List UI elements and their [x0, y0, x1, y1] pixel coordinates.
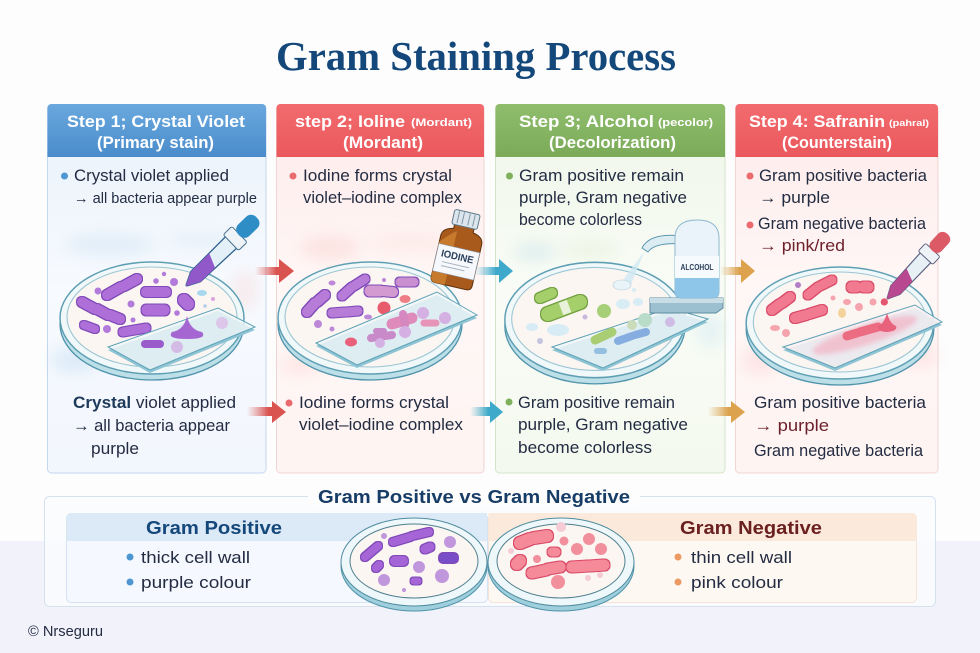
gram positive card: Gram Positive — [146, 518, 282, 538]
petri dish 4 — [746, 267, 934, 385]
step 4 text top: Gram negative bacteria — [758, 215, 927, 233]
step 1 text top: Crystal violet applied — [74, 167, 229, 185]
glass slide 1 — [108, 308, 255, 373]
step 3 header — [496, 104, 725, 157]
gram positive card: purple colour — [141, 574, 252, 592]
step 2 text bottom: Iodine forms crystal — [299, 394, 449, 412]
step 4 header: Step 4: Safranin — [749, 112, 885, 131]
petri dish 3 — [505, 262, 685, 384]
step 4 header: (Counterstain) — [782, 133, 892, 152]
step 1 text bottom: → all bacteria appear — [73, 417, 231, 435]
dropper 4 — [875, 227, 955, 311]
gram negative card: thin cell wall — [691, 549, 792, 567]
panel: step 4 safranin — [736, 104, 955, 473]
glass slide 4 — [783, 305, 942, 371]
comparison heading: Gram Positive vs Gram Negative — [318, 487, 630, 507]
step 3 text bottom: purple, Gram negative — [518, 416, 688, 434]
gram positive card: thick cell wall — [141, 549, 250, 567]
step 3 text top — [506, 167, 687, 229]
glass slide 3 — [552, 308, 708, 371]
gram negative card: Gram Negative — [680, 518, 822, 538]
arrow: step 3 to 4 top — [720, 259, 755, 283]
step 4 text bottom: → purple — [754, 417, 829, 435]
petri dish: gram negative — [488, 518, 634, 611]
step 2 text top — [290, 167, 463, 207]
petri dish: gram positive — [341, 518, 487, 611]
step 1 text bottom: Crystal violet applied — [73, 394, 236, 412]
arrow: step 2 to 3 bottom — [470, 401, 503, 423]
arrow: step 2 to 3 top — [475, 259, 513, 283]
step 2 text top: Iodine forms crystal — [303, 167, 452, 185]
watercolor wash — [742, 343, 938, 374]
step 3 text top: become colorless — [519, 211, 642, 229]
panel: step 2 iodine — [276, 104, 488, 473]
panel: gram positive vs gram negative — [44, 487, 936, 611]
step 3 text bottom — [506, 394, 688, 457]
step 4 header — [736, 104, 938, 157]
step 2 text bottom: violet–iodine complex — [299, 416, 464, 434]
copyright: © Nrseguru — [28, 623, 103, 640]
step 3 text bottom: Gram positive remain — [518, 394, 675, 412]
iodine bottle — [430, 207, 488, 291]
step 4 text bottom — [754, 394, 927, 460]
gram positive card — [66, 513, 488, 602]
step 2 text top: violet–iodine complex — [303, 189, 463, 207]
step 2 header: (Mordant) — [411, 117, 472, 129]
step 2 header: (Mordant) — [343, 133, 423, 152]
step 3 header: Step 3; Alcohol — [519, 112, 654, 131]
arrow: step 1 to 2 top — [255, 259, 294, 283]
gram negative card — [488, 513, 917, 602]
step 1 header — [48, 104, 266, 157]
step 4 text top: → pink/red — [759, 237, 845, 255]
step 3 header: (Decolorization) — [549, 133, 676, 152]
step 3 text top: purple, Gram negative — [519, 189, 687, 207]
step 4 text top — [746, 167, 928, 255]
panel: step 1 crystal violet — [48, 104, 266, 473]
step 4 text bottom: Gram positive bacteria — [754, 394, 927, 412]
iodine bottle: IODINE — [440, 248, 475, 267]
step 1 text bottom: purple — [91, 440, 139, 458]
step 1 header: (Primary stain) — [97, 133, 214, 152]
step 4 text top: → purple — [759, 189, 830, 207]
step 2 header — [276, 104, 484, 157]
arrow: step 3 to 4 bottom — [708, 401, 745, 423]
step 4 text top: Gram positive bacteria — [759, 167, 928, 185]
step 1 text bottom — [73, 394, 236, 458]
step 2 text bottom — [286, 394, 464, 434]
title: Gram Staining Process — [276, 33, 676, 79]
petri dish 2 — [278, 262, 462, 380]
dropper 1 — [179, 210, 264, 294]
arrow: step 1 to 2 bottom — [247, 401, 286, 423]
alcohol bottle and tap: ALCOHOL — [680, 262, 714, 272]
petri dish 1 — [60, 262, 244, 380]
step 3 header: (pecolor) — [658, 117, 713, 129]
step 4 text bottom: Gram negative bacteria — [754, 442, 924, 460]
watercolor wash — [513, 242, 724, 348]
watercolor wash — [280, 235, 450, 375]
step 1 header: Step 1; Crystal Violet — [67, 112, 245, 131]
step 2 header: step 2; Ioline — [295, 112, 405, 131]
step 1 text top — [61, 167, 257, 207]
step 3 text bottom: become colorless — [518, 439, 652, 457]
step 4 header: (pahral) — [889, 118, 929, 128]
alcohol bottle and tap — [613, 220, 723, 313]
step 3 text top: Gram positive remain — [519, 167, 684, 185]
step 1 text top: → all bacteria appear purple — [74, 190, 257, 207]
panel: step 3 alcohol — [496, 104, 725, 473]
glass slide 2 — [316, 292, 477, 368]
gram negative card: pink colour — [691, 574, 784, 592]
watercolor wash — [50, 232, 259, 374]
